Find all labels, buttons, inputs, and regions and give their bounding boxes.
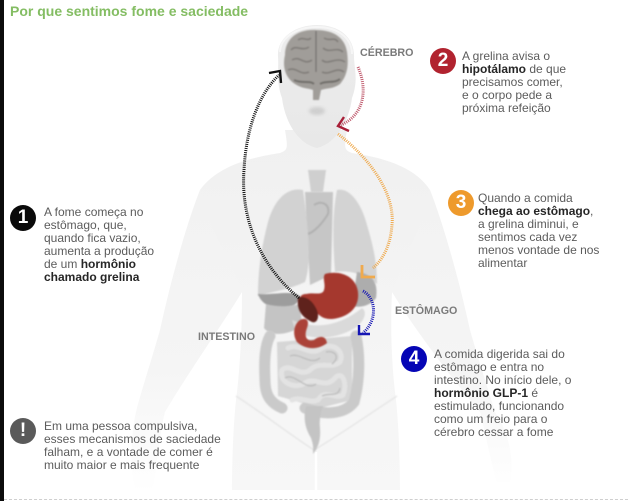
step 1 text: A fome começa no (44, 205, 143, 219)
label: estômago: ESTÔMAGO (395, 305, 457, 317)
intestines (265, 336, 359, 454)
step 3 text: Quando a comida (478, 191, 573, 205)
step 4 text: estômago e entra no (434, 360, 544, 374)
arrow: blue, stomach to intestine (359, 291, 374, 334)
step 4 badge (401, 346, 427, 372)
warning badge: ! (20, 420, 26, 441)
step 3 text (478, 191, 599, 270)
step 4 text: estimulado, funcionando (434, 399, 564, 413)
trachea (308, 170, 326, 192)
step 4 text: hormônio GLP-1 é (434, 386, 538, 400)
step 2 text: hipotálamo de que (462, 62, 566, 76)
stomach (294, 273, 358, 348)
step 4 badge: 4 (409, 348, 419, 369)
step 4 text (434, 347, 571, 439)
step 2 text: A grelina avisa o (462, 49, 550, 63)
warning text (44, 419, 221, 472)
step 1 text: aumenta a produção (44, 244, 154, 258)
human body silhouette (132, 25, 511, 492)
warning badge (10, 418, 36, 444)
left edge strip (0, 0, 4, 501)
title: Por que sentimos fome e saciedade (10, 3, 248, 19)
arrow: red, brain to hypothalamus (338, 67, 363, 131)
step 1 badge: 1 (18, 207, 28, 228)
step 3 text: chega ao estômago, (478, 204, 593, 218)
step 1 text: chamado grelina (44, 270, 139, 284)
step 3 text: sentimos cada vez (478, 230, 577, 244)
step 2 text: precisamos comer, (462, 75, 563, 89)
step 2 text (462, 49, 566, 115)
step 1 badge (10, 205, 36, 231)
liver (258, 272, 376, 338)
warning text: esses mecanismos de saciedade (44, 432, 221, 446)
step 1 text: de um hormônio (44, 257, 136, 271)
step 1 text: estômago, que, (44, 218, 127, 232)
step 1 text: quando fica vazio, (44, 231, 141, 245)
step 2 badge: 2 (438, 50, 448, 71)
label: cérebro: CÉREBRO (360, 47, 413, 59)
brain (284, 30, 348, 100)
step 4 text: cérebro cessar a fome (434, 425, 553, 439)
step 3 text: alimentar (478, 256, 527, 270)
step 3 badge (448, 190, 474, 216)
step 2 text: próxima refeição (462, 101, 551, 115)
step 1 text (44, 205, 154, 284)
warning text: muito maior e mais frequente (44, 458, 199, 472)
lungs (258, 190, 377, 296)
warning text: falham, e a vontade de comer é (44, 445, 213, 459)
step 3 text: menos vontade de nos (478, 243, 599, 257)
step 2 text: e o corpo pede a (462, 88, 552, 102)
arrow: orange, stomach to hypothalamus (338, 134, 392, 277)
step 2 badge (430, 48, 456, 74)
label: intestino: INTESTINO (198, 331, 255, 343)
step 3 text: a grelina diminui, e (478, 217, 579, 231)
step 4 text: intestino. No início dele, o (434, 373, 571, 387)
step 4 text: A comida digerida sai do (434, 347, 565, 361)
step 3 badge: 3 (456, 192, 466, 213)
arrow: black, stomach to brain (244, 71, 299, 298)
warning text: Em uma pessoa compulsiva, (44, 419, 197, 433)
step 4 text: como um freio para o (434, 412, 547, 426)
